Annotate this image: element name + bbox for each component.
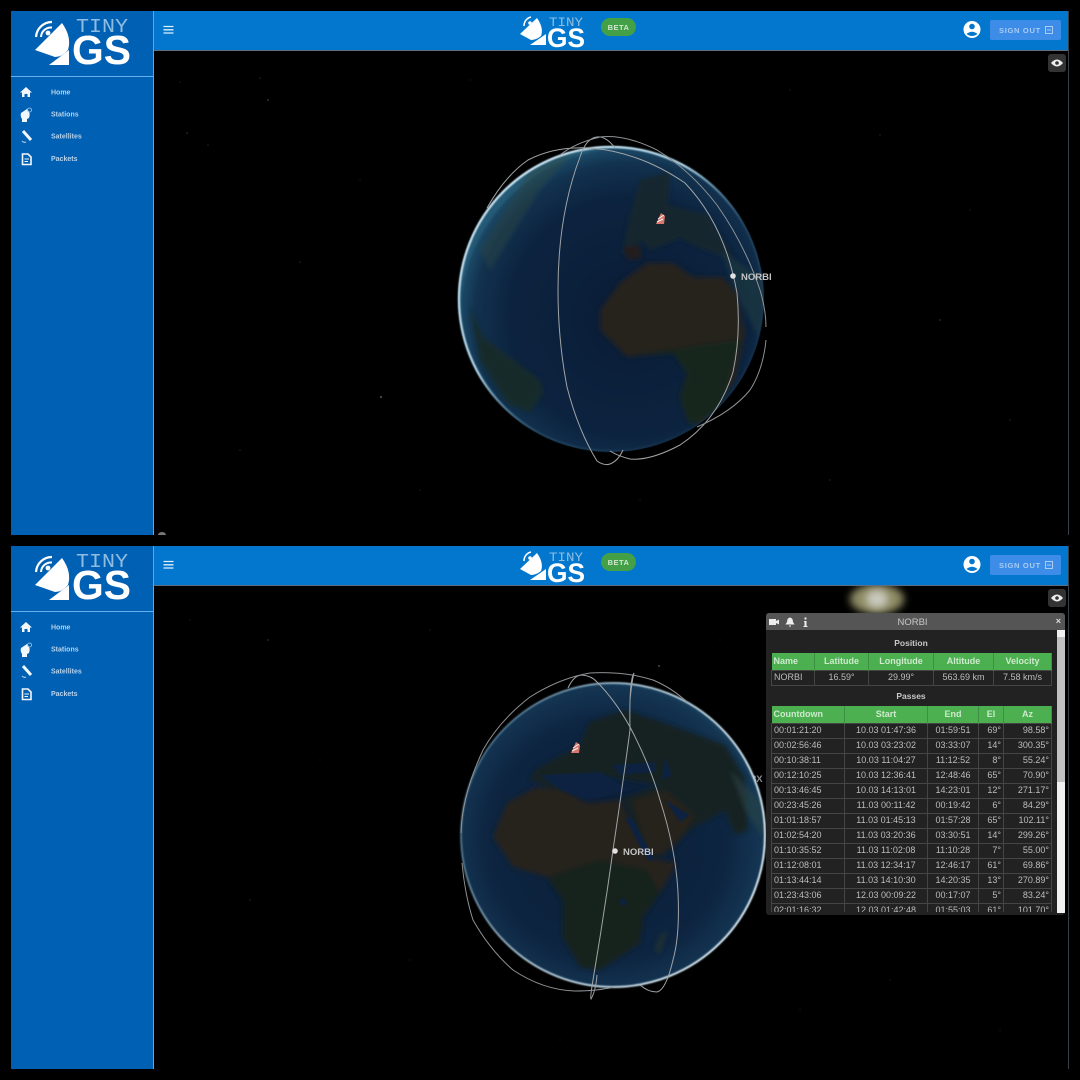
table: passes: 00:12:10:25 xyxy=(774,770,822,780)
table: passes: 6° xyxy=(992,800,1001,810)
header bar xyxy=(154,546,1068,588)
table: passes: Start xyxy=(876,709,896,719)
nav: Home xyxy=(20,622,71,632)
table: passes: 55.24° xyxy=(1023,755,1049,765)
nav: Packets: Packets xyxy=(51,156,78,163)
button: sign out: SIGN OUT xyxy=(999,26,1041,35)
table: passes: 270.89° xyxy=(1018,875,1049,885)
table: position: Velocity xyxy=(1005,656,1040,666)
table: position xyxy=(771,653,1052,686)
table: passes: 01:02:54:20 xyxy=(774,830,822,840)
orbit: first track xyxy=(558,137,623,465)
table: passes: 00:01:21:20 xyxy=(774,725,822,735)
scrollbar xyxy=(1057,630,1065,913)
panel: NORBI info window xyxy=(766,613,1065,915)
table: position: 29.99° xyxy=(888,672,914,682)
table: position: Altitude xyxy=(947,656,980,666)
logo: TinyGS small: GS xyxy=(547,23,585,53)
logo: TinyGS: TINY xyxy=(76,551,129,573)
logo: TinyGS: GS xyxy=(72,27,131,73)
logo: TinyGS: GS xyxy=(72,562,131,608)
table: passes: 11.03 14:10:30 xyxy=(856,875,916,885)
button: sign out: SIGN OUT xyxy=(999,561,1041,570)
table: passes: 271.17° xyxy=(1018,785,1049,795)
nav: Home xyxy=(20,87,71,97)
satellite marker: NORBI: NORBI xyxy=(741,272,772,283)
table: passes: El xyxy=(987,709,995,719)
logo: TinyGS xyxy=(35,551,131,608)
sun glare xyxy=(850,584,904,614)
table: passes: 98.58° xyxy=(1023,725,1049,735)
logo: TinyGS small xyxy=(520,550,585,588)
table: passes: 83.24° xyxy=(1023,890,1049,900)
sidebar xyxy=(11,546,154,1069)
icons: camera, bell, info xyxy=(769,618,808,627)
table: passes: 65° xyxy=(987,815,1001,825)
table: passes: 84.29° xyxy=(1023,800,1049,810)
table: passes: 00:02:56:46 xyxy=(774,740,822,750)
nav: Home: Home xyxy=(51,90,71,96)
icon: menu xyxy=(164,562,174,568)
table: passes: 10.03 01:47:36 xyxy=(856,725,916,735)
table: position: 7.58 km/s xyxy=(1003,672,1042,682)
globe: Africa view xyxy=(460,673,766,999)
nav: Stations: Stations xyxy=(51,112,79,118)
table: position: Name xyxy=(774,656,798,666)
badge: BETA: BETA xyxy=(608,558,630,567)
canvas: starfield xyxy=(154,546,1069,1069)
nav: Home: Home xyxy=(51,624,71,632)
atmosphere limb xyxy=(461,683,765,987)
table: position: NORBI xyxy=(774,672,803,682)
nav: Satellites: Satellites xyxy=(51,668,82,676)
table: passes: 12.03 00:09:22 xyxy=(856,890,916,900)
table: passes: 00:10:38:11 xyxy=(774,755,821,765)
table: passes: 300.35° xyxy=(1018,740,1049,750)
badge: BETA: BETA xyxy=(608,23,630,32)
nav: Packets: Packets xyxy=(51,691,78,698)
icon: ground station marker xyxy=(571,742,580,753)
table: passes xyxy=(771,706,1052,912)
window title bar: NORBI xyxy=(897,617,928,628)
button: sign out xyxy=(990,555,1061,575)
panel: top screenshot xyxy=(11,11,1069,535)
table: passes: 01:10:35:52 xyxy=(774,845,822,855)
table: passes: 11.03 03:20:36 xyxy=(856,830,916,840)
icon: user xyxy=(964,556,980,573)
table: passes: 10.03 11:04:27 xyxy=(856,755,916,765)
header bar xyxy=(154,11,1068,53)
badge: BETA xyxy=(601,18,636,36)
table: passes: 12:48:46 xyxy=(935,770,971,780)
table: passes: 13° xyxy=(987,875,1001,885)
table: passes: 8° xyxy=(992,755,1001,765)
table: passes: 00:17:07 xyxy=(935,890,971,900)
orbit: first track xyxy=(568,675,678,992)
logo: TinyGS xyxy=(35,16,131,73)
map: continents xyxy=(470,150,765,425)
button: sign out xyxy=(990,20,1061,40)
logo: TinyGS small: TINY xyxy=(549,15,583,30)
nav: Stations: Stations xyxy=(51,646,79,654)
table: passes: 03:33:07 xyxy=(935,740,971,750)
window title bar xyxy=(766,613,1065,630)
table: passes: 10.03 14:13:01 xyxy=(856,785,916,795)
table: passes: 61° xyxy=(987,860,1001,870)
logo: TinyGS small: TINY xyxy=(549,550,583,565)
nav: Packets xyxy=(22,154,78,164)
table: passes: 11:12:52 xyxy=(936,755,970,765)
icon: user xyxy=(964,21,980,38)
nav: Satellites xyxy=(22,131,82,142)
table: passes: 01:57:28 xyxy=(935,815,971,825)
table: passes: 01:01:18:57 xyxy=(774,815,822,825)
table: passes: 102.11° xyxy=(1019,815,1049,825)
window title bar: × xyxy=(1056,616,1061,626)
heading: Position: Position xyxy=(894,638,928,648)
icon: visibility toggle xyxy=(1048,54,1066,72)
orbit: second track xyxy=(591,673,634,999)
table: passes: 70.90° xyxy=(1023,770,1049,780)
table: position: 16.59° xyxy=(828,672,855,682)
table: passes: 5° xyxy=(992,890,1001,900)
table: passes: 69° xyxy=(987,725,1001,735)
panel: bottom screenshot xyxy=(11,546,1069,1069)
icon: visibility toggle xyxy=(1048,589,1066,607)
satellite marker: NORBI: NORBI xyxy=(623,847,654,858)
table: passes: 01:13:44:14 xyxy=(774,875,822,885)
table: passes: 299.26° xyxy=(1018,830,1049,840)
table: passes: 14:20:35 xyxy=(935,875,971,885)
table: passes: 01:59:51 xyxy=(935,725,971,735)
icon: menu xyxy=(164,26,174,33)
table: passes: 00:19:42 xyxy=(935,800,971,810)
table: passes: 14:23:01 xyxy=(935,785,971,795)
table: position: 563.69 km xyxy=(942,672,985,682)
table: passes: Az xyxy=(1022,709,1033,719)
nav: Stations xyxy=(21,108,79,122)
logo: TinyGS small: GS xyxy=(547,558,585,588)
table: passes: 10.03 12:36:41 xyxy=(856,770,916,780)
table: passes: 11.03 00:11:42 xyxy=(857,800,915,810)
table: passes: 55.00° xyxy=(1023,845,1049,855)
table: passes: 12° xyxy=(987,785,1001,795)
map: continents xyxy=(493,710,765,970)
nav: Satellites: Satellites xyxy=(51,134,82,140)
table: passes: 01:12:08:01 xyxy=(774,860,822,870)
table: passes: Countdown xyxy=(774,709,823,719)
nav: Packets xyxy=(22,689,78,700)
badge: BETA xyxy=(601,553,636,571)
table: passes: 11:10:28 xyxy=(936,845,970,855)
table: passes: 11.03 11:02:08 xyxy=(857,845,915,855)
heading: Passes: Passes xyxy=(896,691,926,701)
table: passes: End xyxy=(944,709,962,719)
table: passes: 69.86° xyxy=(1023,860,1049,870)
table: passes: 10.03 03:23:02 xyxy=(856,740,916,750)
orbit: third track xyxy=(461,673,687,991)
table: passes: 01:23:43:06 xyxy=(774,890,822,900)
orbit: third track xyxy=(560,137,766,427)
nav: Stations xyxy=(21,643,79,657)
table: passes: 65° xyxy=(987,770,1001,780)
nav: Satellites xyxy=(22,666,82,677)
logo: TinyGS: TINY xyxy=(76,16,129,38)
canvas: starfield xyxy=(154,11,1069,535)
clipped station label: 8X xyxy=(751,774,763,785)
icon: ground station marker xyxy=(656,213,665,224)
logo: TinyGS small xyxy=(520,15,585,53)
map: seas xyxy=(540,757,690,906)
table: position: Longitude xyxy=(879,656,923,666)
table: passes: 11.03 12:34:17 xyxy=(856,860,916,870)
table: passes: 14° xyxy=(987,830,1001,840)
table: passes: 14° xyxy=(987,740,1001,750)
sidebar xyxy=(11,11,154,535)
table: position: Latitude xyxy=(824,656,859,666)
atmosphere limb xyxy=(459,147,763,451)
table: passes: 12:46:17 xyxy=(935,860,971,870)
orbit: second track xyxy=(487,148,738,459)
globe: Atlantic view xyxy=(458,137,772,465)
table: passes: 00:23:45:26 xyxy=(774,800,822,810)
table: passes: 7° xyxy=(992,845,1001,855)
table: passes: 03:30:51 xyxy=(935,830,971,840)
table: passes: 11.03 01:45:13 xyxy=(856,815,916,825)
table: passes: 00:13:46:45 xyxy=(774,785,822,795)
